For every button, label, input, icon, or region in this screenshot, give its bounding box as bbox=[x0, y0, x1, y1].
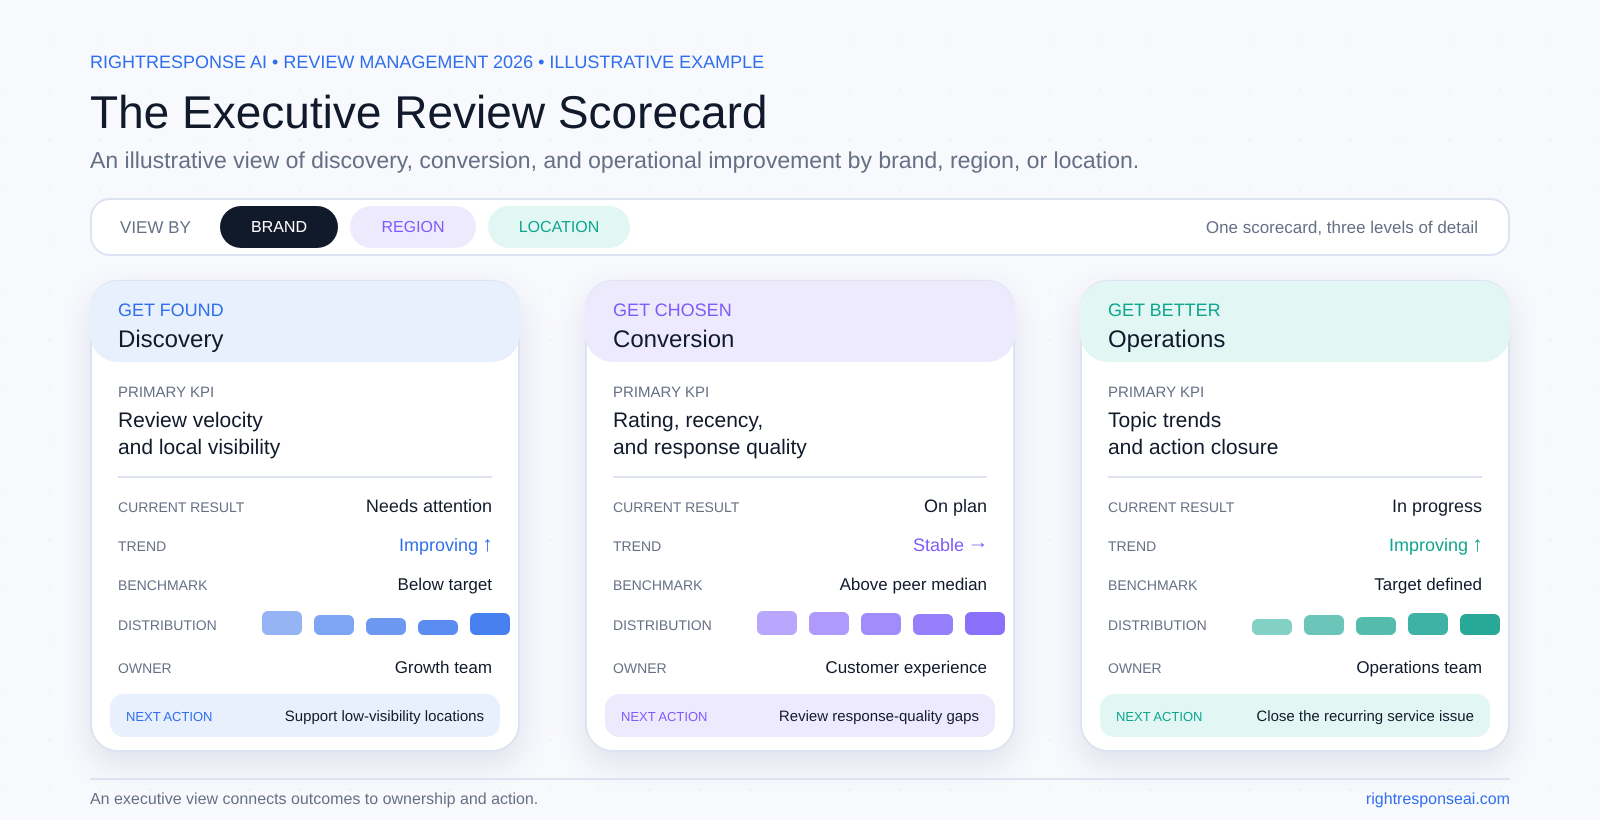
card header bbox=[90, 281, 520, 362]
next action bbox=[110, 694, 500, 737]
benchmark label: BENCHMARK bbox=[613, 577, 702, 593]
trend label: TREND bbox=[1108, 538, 1156, 554]
view-by note: One scorecard, three levels of detail bbox=[1206, 218, 1478, 237]
eyebrow: RIGHTRESPONSE AI • REVIEW MANAGEMENT 2026 • ILLUSTRATIVE EXAMPLE bbox=[90, 52, 764, 72]
next action: Support low-visibility locations bbox=[285, 708, 484, 725]
primary KPI text bbox=[1108, 409, 1278, 458]
trend value: Improving bbox=[399, 535, 478, 555]
primary KPI text: Review velocity bbox=[118, 409, 263, 432]
primary KPI text: and local visibility bbox=[118, 436, 280, 458]
primary KPI text: Topic trends bbox=[1108, 409, 1221, 432]
trend label: TREND bbox=[613, 538, 661, 554]
subtitle: An illustrative view of discovery, conversion, and operational improvement by brand, region, or location. bbox=[90, 147, 1139, 173]
next action: Close the recurring service issue bbox=[1256, 708, 1474, 725]
distribution bars bbox=[262, 611, 510, 635]
pill: location: LOCATION bbox=[519, 219, 599, 236]
next action: NEXT ACTION bbox=[1116, 709, 1202, 724]
current result value: In progress bbox=[1392, 496, 1482, 516]
benchmark label: BENCHMARK bbox=[118, 577, 207, 593]
benchmark value: Above peer median bbox=[840, 575, 987, 594]
view-by bar bbox=[90, 198, 1510, 256]
current result value: Needs attention bbox=[366, 496, 492, 516]
current result label: CURRENT RESULT bbox=[118, 499, 244, 515]
next action: NEXT ACTION bbox=[621, 709, 707, 724]
benchmark value: Target defined bbox=[1374, 575, 1482, 594]
owner value: Operations team bbox=[1356, 658, 1482, 677]
next action: NEXT ACTION bbox=[126, 709, 212, 724]
distribution bars bbox=[757, 611, 1005, 635]
distribution label: DISTRIBUTION bbox=[1108, 617, 1207, 633]
trend value: Improving bbox=[1389, 535, 1468, 555]
panel: discovery bbox=[90, 280, 520, 752]
primary KPI text bbox=[613, 409, 807, 458]
card header bbox=[1080, 281, 1510, 362]
card header: GET FOUND bbox=[118, 300, 224, 320]
trend value: ↑ bbox=[482, 532, 493, 556]
current result label: CURRENT RESULT bbox=[613, 499, 739, 515]
footer link: rightresponseai.com bbox=[1366, 791, 1510, 808]
trend value bbox=[913, 532, 989, 555]
current result label: CURRENT RESULT bbox=[1108, 499, 1234, 515]
primary KPI text: and response quality bbox=[613, 436, 807, 458]
card header: Operations bbox=[1108, 326, 1225, 353]
owner label: OWNER bbox=[118, 660, 172, 676]
trend value: → bbox=[967, 532, 989, 552]
distribution label: DISTRIBUTION bbox=[613, 617, 712, 633]
owner value: Customer experience bbox=[825, 658, 987, 677]
primary KPI label: PRIMARY KPI bbox=[1108, 384, 1204, 401]
primary KPI text: Rating, recency, bbox=[613, 409, 763, 432]
primary KPI text bbox=[118, 409, 280, 458]
panel: operations bbox=[1080, 280, 1510, 752]
footer note: An executive view connects outcomes to ownership and action. bbox=[90, 791, 538, 808]
pill: brand bbox=[220, 206, 338, 248]
primary KPI text: and action closure bbox=[1108, 436, 1278, 458]
card header bbox=[585, 281, 1015, 362]
card header: Discovery bbox=[118, 326, 223, 353]
pill: region: REGION bbox=[381, 219, 445, 236]
owner label: OWNER bbox=[613, 660, 667, 676]
trend value: Stable bbox=[913, 535, 964, 555]
owner value: Growth team bbox=[395, 658, 492, 677]
benchmark label: BENCHMARK bbox=[1108, 577, 1197, 593]
title: The Executive Review Scorecard bbox=[90, 86, 768, 138]
distribution bars bbox=[1252, 613, 1500, 635]
next action bbox=[1100, 694, 1490, 737]
view-by label: VIEW BY bbox=[120, 218, 191, 237]
card header: Conversion bbox=[613, 326, 734, 353]
distribution label: DISTRIBUTION bbox=[118, 617, 217, 633]
benchmark value: Below target bbox=[398, 575, 492, 594]
trend label: TREND bbox=[118, 538, 166, 554]
primary KPI label: PRIMARY KPI bbox=[613, 384, 709, 401]
owner label: OWNER bbox=[1108, 660, 1162, 676]
pill: location bbox=[488, 206, 630, 248]
primary KPI label: PRIMARY KPI bbox=[118, 384, 214, 401]
card header: GET CHOSEN bbox=[613, 300, 732, 320]
panel: conversion bbox=[585, 280, 1015, 752]
pill: region bbox=[350, 206, 476, 248]
card header: GET BETTER bbox=[1108, 300, 1221, 320]
next action: Review response-quality gaps bbox=[779, 708, 979, 725]
trend value: ↑ bbox=[1472, 532, 1483, 556]
current result value: On plan bbox=[924, 496, 987, 516]
next action bbox=[605, 694, 995, 737]
pill: brand: BRAND bbox=[251, 219, 307, 236]
